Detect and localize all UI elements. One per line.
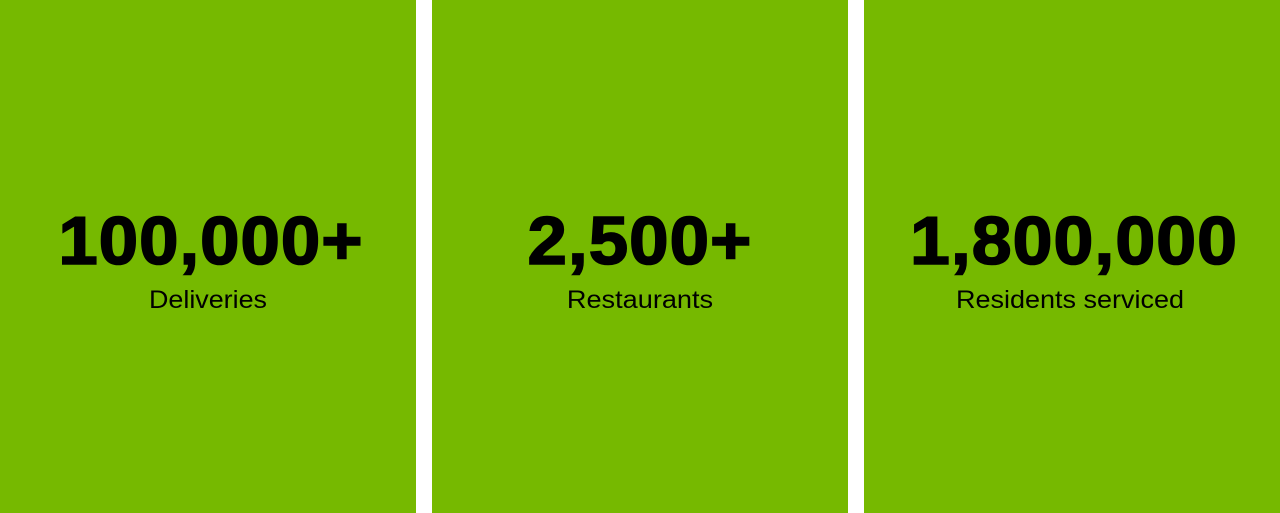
panel: residents serviced — [864, 0, 1280, 513]
panel: deliveries — [0, 0, 416, 513]
stat number: deliveries: 100,000+ — [58, 202, 364, 278]
stat label: residents: Residents serviced — [955, 286, 1184, 314]
stat number: restaurants: 2,500+ — [528, 202, 752, 278]
stat label: restaurants: Restaurants — [567, 286, 713, 314]
stat number: residents: 1,800,000 — [910, 202, 1238, 278]
panel: restaurants — [432, 0, 848, 513]
stat label: deliveries: Deliveries — [149, 286, 267, 314]
